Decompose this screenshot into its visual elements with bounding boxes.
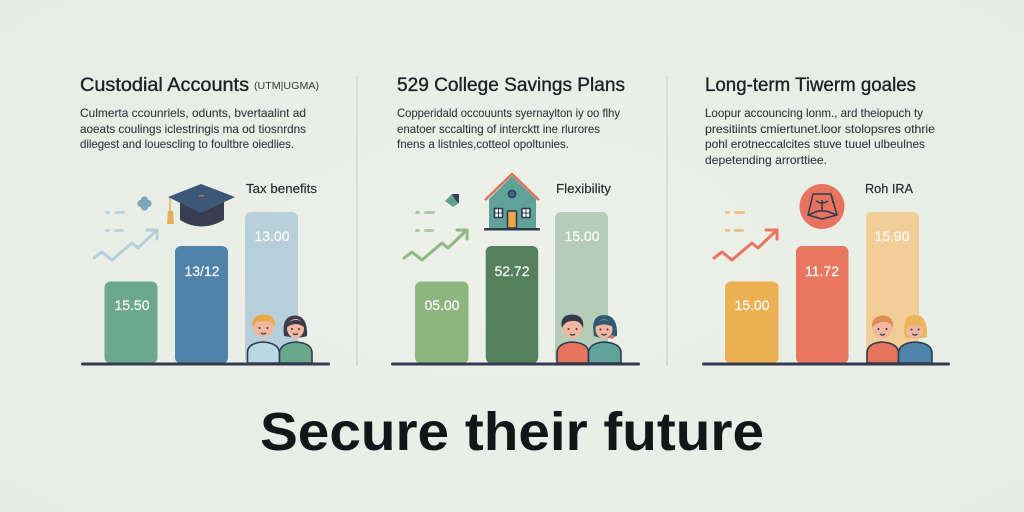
- bar: 13/12: [175, 246, 228, 364]
- icon: graduation cap: [167, 184, 235, 226]
- bar: 05.00: 05.00: [424, 297, 460, 313]
- icon: two children: [248, 314, 312, 363]
- panel: long-term goals: [705, 75, 935, 364]
- bar: 13.00: [245, 212, 298, 364]
- heading: 529 college savings plans: 529 College Savings Plans: [397, 75, 625, 96]
- text block: custodial description: dilegest and louescling to foultbre oiedlies.: [80, 137, 294, 151]
- label: roth ira: Roh IRA: [865, 182, 914, 196]
- bar: 15.90: 15.90: [874, 228, 910, 244]
- bar: 13.00: 13.00: [254, 228, 290, 244]
- bar: 15.00: 15.00: [734, 297, 770, 313]
- heading: custodial accounts: [80, 75, 319, 96]
- text block: custodial description: Culmerta ccounriels, odunts, bvertaalint ad: [80, 106, 306, 120]
- text block: custodial description: [80, 106, 306, 151]
- label: flexibility: Flexibility: [556, 182, 612, 196]
- label: tax benefits: Tax benefits: [246, 182, 317, 196]
- icon: trend arrow: [94, 230, 157, 260]
- icon: dashes: [415, 211, 435, 232]
- heading: custodial accounts: Custodial Accounts: [80, 75, 249, 96]
- text block: long-term description: pohl erotneccalcites stuve tuuel ulbeulnes: [705, 137, 925, 151]
- icon: house: [484, 174, 540, 230]
- bar: 15.50: 15.50: [114, 297, 150, 313]
- text block: 529 description: enatoer sccalting of intercktt ine rlurores: [397, 122, 600, 136]
- text block: 529 description: Copperidald occouunts syernaylton iy oo flhy: [397, 106, 620, 120]
- baselines: [81, 362, 950, 366]
- bar: 11.72: 11.72: [805, 263, 839, 279]
- bar: 15.90: [866, 212, 919, 364]
- bar: 52.72: [486, 246, 538, 364]
- icon: trend arrow: [714, 230, 777, 260]
- icon: coral circle emblem: [800, 184, 844, 229]
- bar: 11.72: [796, 246, 848, 364]
- bar: 05.00: [415, 282, 468, 364]
- heading: custodial accounts: (UTM|UGMA): [254, 80, 319, 92]
- text block: long-term description: depetending arrorttiee.: [705, 153, 827, 167]
- bar: 13/12: 13/12: [184, 263, 220, 279]
- bar: 15.00: 15.00: [564, 228, 600, 244]
- icon: two children: [867, 315, 932, 363]
- icon: two children: [557, 314, 621, 363]
- text block: long-term description: [705, 106, 935, 167]
- heading: long-term goals: Long-term Tiwerm goales: [705, 75, 916, 96]
- bar: 52.72: 52.72: [494, 263, 530, 279]
- bar: 15.00: [555, 212, 608, 364]
- bar: 15.00: [725, 282, 778, 364]
- icon: dashes: [725, 211, 745, 232]
- text block: 529 description: fnens a listnles,cotteol opoltunies.: [397, 137, 569, 151]
- icon: dashes: [105, 211, 125, 232]
- icon: trend arrow: [404, 230, 467, 260]
- panel: custodial accounts: [80, 75, 319, 364]
- bar: 15.50: [104, 282, 158, 364]
- text block: long-term description: presitiints cmiertunet.loor stolopsres othrie: [705, 122, 935, 136]
- panel: 529 college savings plans: [397, 75, 625, 364]
- text block: 529 description: [397, 106, 620, 151]
- icon: clover: [137, 196, 152, 211]
- text block: custodial description: aoeats coulings iclestringis ma od tiosnrdns: [80, 122, 306, 136]
- text block: long-term description: Loopur accouncing lonm., ard theiopuch ty: [705, 106, 923, 120]
- title: Secure their future: [260, 402, 764, 462]
- icon: small arrow tag: [445, 194, 459, 207]
